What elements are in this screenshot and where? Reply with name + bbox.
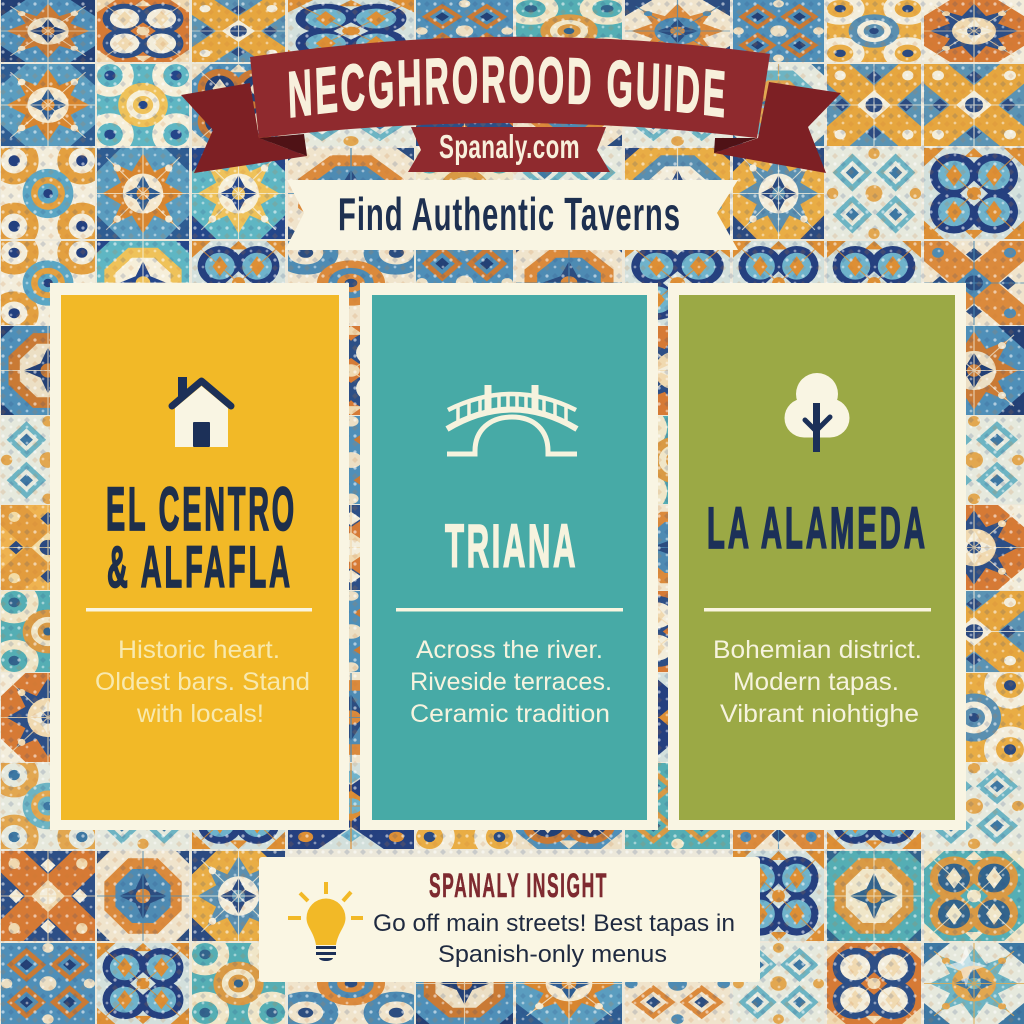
heading: Triana: TRIANA bbox=[445, 512, 578, 580]
description text: Riveside terraces. bbox=[410, 668, 612, 696]
subtitle plaque bbox=[285, 180, 738, 250]
description text: Historic heart. bbox=[118, 636, 280, 664]
main ribbon band bbox=[250, 37, 770, 138]
callout text bbox=[373, 910, 735, 968]
divider bbox=[704, 608, 931, 612]
divider bbox=[86, 608, 312, 612]
callout heading: SPANALY INSIGHT bbox=[429, 867, 608, 905]
subtitle plaque: Find Authentic Taverns bbox=[338, 188, 681, 240]
description text: Across the river. bbox=[416, 636, 603, 664]
description text: Ceramic tradition bbox=[410, 700, 610, 728]
callout text: Spanish-only menus bbox=[438, 941, 667, 968]
callout text: Go off main streets! Best tapas in bbox=[373, 910, 735, 937]
website ribbon: Spanaly.com bbox=[439, 128, 580, 165]
description text bbox=[713, 636, 922, 728]
title: NECGHROROOD GUIDE bbox=[288, 56, 725, 118]
description text: with locals! bbox=[136, 700, 264, 728]
panel: El Centro and Alfafla: EL CENTRO bbox=[106, 475, 297, 543]
heading: El Centro and Alfafla bbox=[106, 475, 297, 600]
ribbon fold shadows bbox=[259, 134, 757, 156]
title bbox=[288, 56, 725, 118]
watermark sparkle bbox=[945, 945, 987, 987]
description text: Oldest bars. Stand bbox=[95, 668, 310, 696]
description text: Vibrant niohtighe bbox=[720, 700, 919, 728]
left ribbon tail bbox=[181, 83, 307, 173]
description text: Bohemian district. bbox=[713, 636, 922, 664]
description text: Modern tapas. bbox=[733, 668, 899, 696]
description text bbox=[410, 636, 612, 728]
icon: house bbox=[172, 377, 231, 447]
divider bbox=[396, 608, 623, 612]
right ribbon tail bbox=[714, 82, 841, 173]
panel: Triana bbox=[360, 283, 658, 830]
description text bbox=[95, 636, 310, 728]
callout: Spanaly insight bbox=[259, 857, 760, 982]
icon: bridge bbox=[447, 385, 577, 454]
header ribbon banner bbox=[181, 36, 841, 173]
panel: El Centro and Alfafla bbox=[50, 283, 349, 830]
panel: La Alameda bbox=[668, 283, 966, 830]
icon: tree bbox=[784, 373, 850, 452]
icon: light bulb bbox=[288, 882, 363, 961]
website ribbon bbox=[408, 127, 610, 172]
heading: El Centro and Alfafla: & ALFAFLA bbox=[107, 535, 293, 600]
